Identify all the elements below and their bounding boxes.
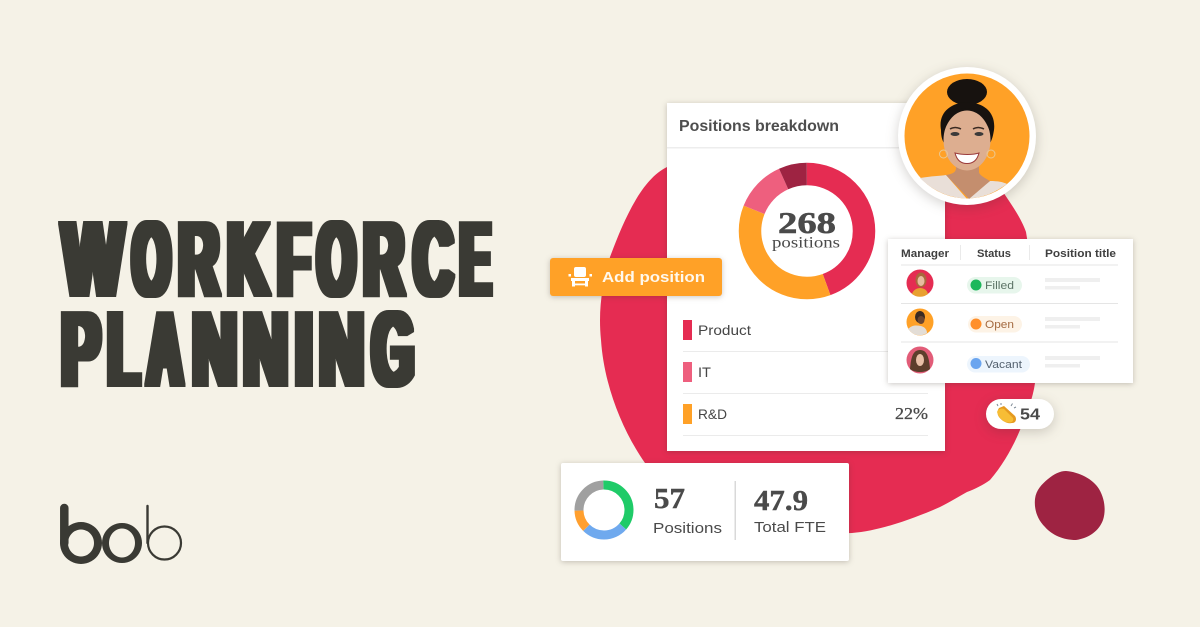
title: O <box>318 200 355 318</box>
status pill: open <box>968 316 1022 332</box>
legend row: R&D: 22% <box>895 404 928 423</box>
title: L <box>108 290 139 408</box>
stat: positions: Positions <box>653 520 722 537</box>
icon: clapping hands <box>997 403 1016 423</box>
title: O <box>133 200 170 318</box>
reaction pill: clap 54 <box>986 399 1054 429</box>
title: A <box>148 290 182 408</box>
donut total <box>772 205 840 252</box>
status pill: vacant <box>967 356 1030 372</box>
title <box>62 200 490 408</box>
title: W <box>62 200 123 318</box>
status pill: vacant: Vacant <box>985 359 1022 371</box>
table header <box>901 248 1116 260</box>
title: F <box>278 200 310 318</box>
legend row: IT <box>683 362 711 382</box>
table header: Status <box>977 248 1011 260</box>
title: R <box>179 200 219 318</box>
logo: bob <box>60 506 181 564</box>
avatar: manager one <box>906 270 934 297</box>
status pill: filled: Filled <box>985 280 1014 292</box>
button: add position: Add position <box>602 269 705 286</box>
title: I <box>295 290 313 408</box>
row: vacant <box>906 346 1100 374</box>
infographic canvas: E <box>460 200 490 318</box>
dark red blob <box>1035 471 1105 540</box>
reaction pill: clap 54: 54 <box>1020 406 1040 424</box>
avatar: manager three <box>906 346 934 374</box>
donut chart: positions <box>750 174 864 288</box>
donut total: positions <box>772 234 840 252</box>
title: N <box>319 290 364 408</box>
title: P <box>62 290 100 408</box>
panel: positions summary <box>561 463 849 561</box>
stat: total FTE: 47.9 <box>754 486 808 517</box>
portrait: woman in circle <box>898 67 1036 205</box>
panel heading: Positions breakdown <box>679 118 839 135</box>
panel: manager table <box>888 239 1133 383</box>
title: N <box>243 290 288 408</box>
title: N <box>192 290 237 408</box>
legend row: Product: Product <box>698 322 751 338</box>
legend row: IT: IT <box>698 364 711 380</box>
donut total: 268 <box>778 205 836 240</box>
row: filled <box>906 270 1100 297</box>
table header: Position title <box>1045 248 1116 260</box>
red background blob <box>600 150 1036 533</box>
title: G <box>372 290 414 408</box>
donut chart: summary <box>579 485 629 535</box>
stat: total FTE <box>754 486 826 536</box>
status pill: filled <box>967 277 1022 294</box>
row: open <box>906 308 1100 336</box>
title: R <box>364 200 404 318</box>
legend row: R&D: R&D <box>698 406 727 422</box>
icon: armchair <box>568 267 592 286</box>
stat: total FTE: Total FTE <box>754 519 826 536</box>
button: add position <box>550 258 722 296</box>
stat: positions <box>653 484 722 537</box>
table header: Manager <box>901 248 950 260</box>
panel: positions breakdown <box>667 103 945 451</box>
legend row: R&D <box>683 404 928 424</box>
title: C <box>414 200 452 318</box>
status pill: open: Open <box>985 319 1014 331</box>
title: K <box>228 200 268 318</box>
stat: positions: 57 <box>654 484 685 515</box>
avatar: manager two <box>906 308 934 336</box>
legend row: Product <box>683 320 751 340</box>
